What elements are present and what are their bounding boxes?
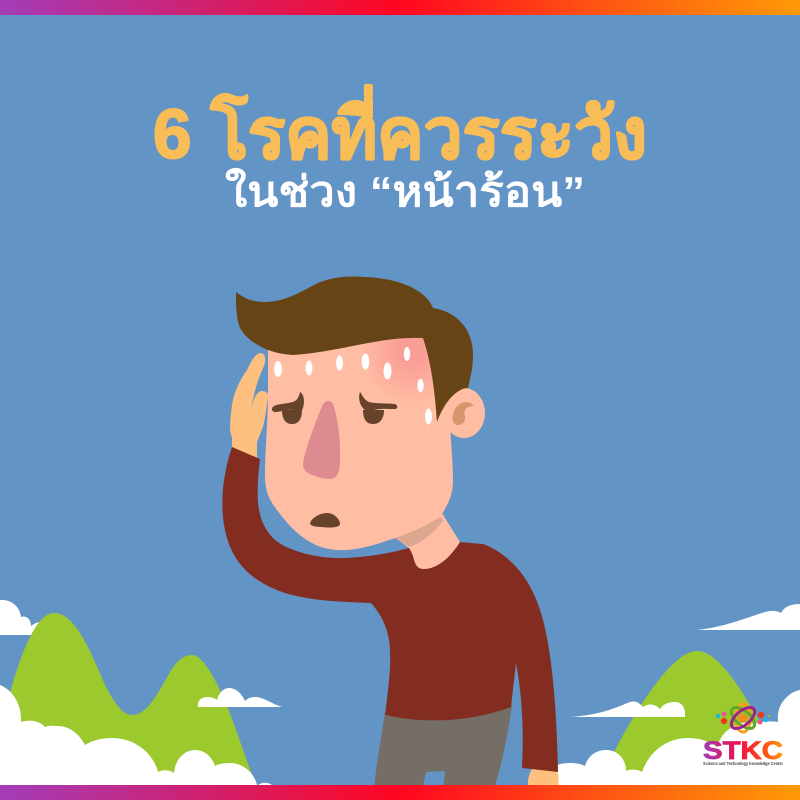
ear inner	[453, 402, 474, 425]
raised hand	[230, 353, 268, 462]
bottom gradient bar	[0, 785, 800, 800]
left brow	[272, 392, 304, 412]
cloud: lower left small	[258, 783, 272, 785]
subtitle: ในช่วง “หน้าร้อน”	[225, 167, 585, 215]
neck	[385, 510, 460, 569]
hair	[236, 277, 473, 422]
man	[222, 277, 559, 790]
mountain: right	[610, 651, 770, 775]
shirt and arm	[222, 447, 558, 772]
neck shadow	[393, 517, 443, 547]
mountains: left	[8, 613, 252, 775]
title: 6 โรคที่ควรระวัง	[153, 84, 647, 173]
forehead flush	[360, 330, 440, 420]
logo tagline: Science and Technology Knowledge Center	[703, 761, 783, 766]
ear	[443, 388, 485, 438]
logo wordmark: STKC	[703, 737, 783, 765]
face	[265, 335, 453, 550]
sweat drops	[274, 347, 432, 424]
left eye	[282, 410, 302, 424]
logo atom icon	[714, 704, 770, 732]
right eye	[363, 410, 384, 424]
lower hand	[528, 768, 559, 790]
mouth	[310, 513, 340, 528]
nose	[303, 401, 340, 479]
pants	[374, 705, 512, 790]
cloud: upper left	[0, 600, 41, 635]
cloud: upper right	[697, 604, 800, 630]
clouds: lower left	[0, 685, 257, 785]
cloud: middle right	[570, 701, 685, 717]
logo: STKC	[703, 704, 783, 766]
cloud: middle left	[198, 688, 282, 707]
right brow	[359, 392, 397, 411]
top gradient bar	[0, 0, 800, 15]
clouds: lower right	[555, 690, 800, 790]
